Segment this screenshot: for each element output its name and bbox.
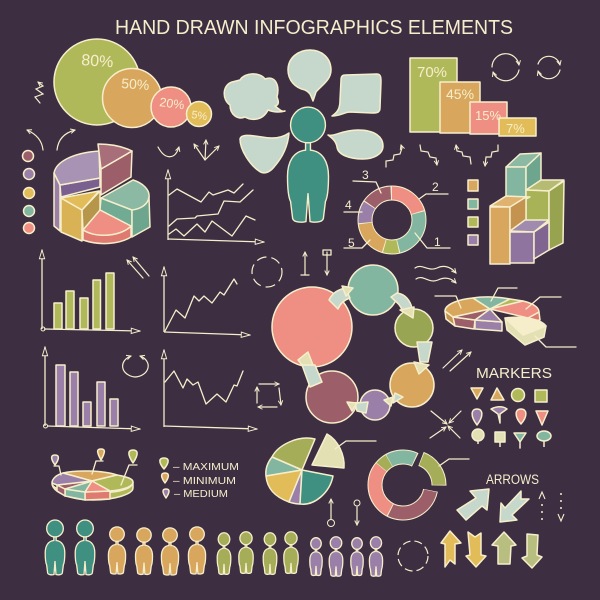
icon: diagonal arrows [443,350,471,371]
icon: dashed circle arrows [252,257,282,287]
icon: square arrows [257,384,281,407]
legend: maximum minimum medium: – MINIMUM [173,475,236,487]
bar chart: purple [44,347,140,429]
icon: pin arrows [328,499,360,526]
markers heading: MARKERS [476,365,552,382]
icon: circular arrows [492,54,560,81]
stepped bar chart: 15% [475,108,501,123]
legend squares [468,180,478,245]
legend dots [22,150,34,234]
donut chart with numbered labels [344,168,450,250]
speech balloon: square [332,74,381,116]
3D pie chart [54,144,150,244]
icon: squiggle arrow [35,82,43,103]
ring chart with detached segment [375,457,469,513]
icon: curved arrows [27,130,75,150]
line chart: rising [164,267,250,335]
donut chart with numbered labels: 4 [345,198,352,212]
big arrows [441,489,542,568]
bubble chart: percentages: 20% [159,95,185,112]
bubble chart: percentages [54,39,212,128]
3D bar chart [490,153,564,264]
donut chart with numbered labels: 2 [432,180,439,194]
stepped bar chart: 7% [506,121,525,136]
bubble chart: percentages: 5% [191,109,208,123]
marker icons grid [471,388,551,448]
bubble chart: percentages: 50% [121,75,150,93]
speech balloon: cloud [224,74,285,119]
legend: maximum minimum medium [160,458,239,500]
process flow of circles [272,265,434,423]
stepped bar chart: 45% [446,86,474,102]
speech balloon: oval [328,130,383,159]
stepped bar chart [410,58,536,136]
exploded 3D pie chart [435,288,576,347]
icon: up and down arrows [301,250,331,275]
icon: dashed circle [398,541,428,571]
people row [45,520,383,576]
icon: dotted arrows [539,492,564,521]
legend: maximum minimum medium: – MAXIMUM [173,461,239,473]
speech balloon: top [288,50,331,101]
line chart: fluctuating [164,350,257,429]
icon: double arrows [127,257,149,278]
icon: stair arrows [386,145,498,167]
arrows heading: ARROWS [486,472,539,487]
title: HAND DRAWN INFOGRAPHICS ELEMENTS [115,17,513,39]
donut chart with numbered labels: 1 [434,235,441,249]
bar chart: green [41,250,140,331]
icon: arrows group [158,140,219,160]
donut chart with numbered labels: 5 [348,236,355,250]
speech balloon: triangle [240,133,289,173]
icon: arc arrows [123,356,148,377]
legend: maximum minimum medium: – MEDIUM [174,488,228,500]
icon: converging arrows [430,411,461,438]
map pie chart with pins [52,449,137,500]
line chart: three series [168,170,264,242]
bubble chart: percentages: 80% [81,52,114,71]
person: large figure [288,107,328,222]
icon: wave arrows [415,266,456,283]
donut chart with numbered labels: 3 [362,168,369,182]
pie chart with exploded wedge [266,434,376,504]
stepped bar chart: 70% [417,64,447,81]
